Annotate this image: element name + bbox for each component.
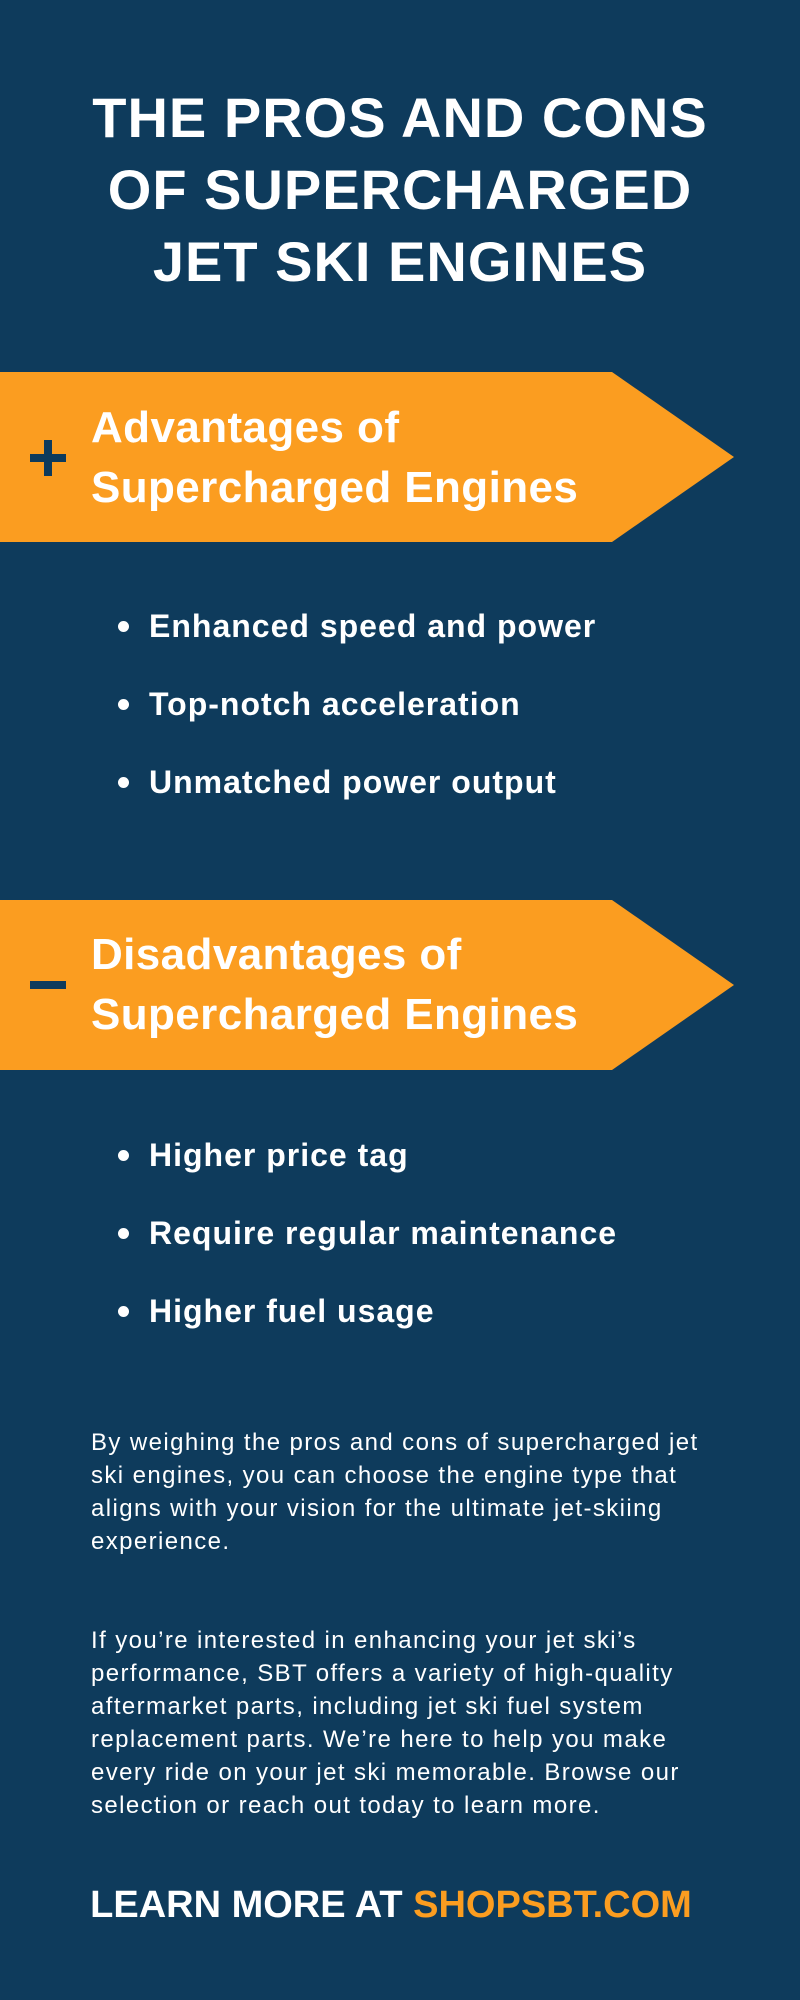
heading: advantages: Advantages of xyxy=(91,403,399,452)
paragraph: SBT offer: selection or reach out today to learn more. xyxy=(91,1792,601,1819)
icon: minus xyxy=(30,981,66,989)
list: advantages xyxy=(118,608,596,800)
list: disadvantages: Higher price tag xyxy=(149,1137,409,1173)
footer call to action: LEARN MORE AT SHOPSBT.COM xyxy=(90,1884,692,1926)
list: disadvantages: Higher fuel usage xyxy=(149,1293,434,1329)
paragraph: summary: aligns with your vision for the ultimate jet-skiing xyxy=(91,1495,663,1522)
banner: advantages xyxy=(0,372,734,542)
paragraph: summary: ski engines, you can choose the engine type that xyxy=(91,1462,677,1489)
paragraph: summary xyxy=(91,1429,699,1555)
title: OF SUPERCHARGED xyxy=(108,158,692,221)
heading: advantages xyxy=(91,403,578,512)
heading: disadvantages: Disadvantages of xyxy=(91,930,462,979)
paragraph: summary: experience. xyxy=(91,1528,230,1555)
title xyxy=(92,86,708,293)
title: JET SKI ENGINES xyxy=(153,230,647,293)
banner: disadvantages xyxy=(0,900,734,1070)
paragraph: SBT offer: performance, SBT offers a variety of high-quality xyxy=(91,1660,674,1687)
paragraph: SBT offer: every ride on your jet ski memorable. Browse our xyxy=(91,1759,680,1786)
list: advantages: Unmatched power output xyxy=(149,764,557,800)
paragraph: summary: By weighing the pros and cons of supercharged jet xyxy=(91,1429,699,1456)
title: THE PROS AND CONS xyxy=(92,86,708,149)
heading: disadvantages xyxy=(91,930,578,1039)
paragraph: SBT offer: replacement parts. We’re here to help you make xyxy=(91,1726,667,1753)
list: disadvantages: Require regular maintenance xyxy=(149,1215,617,1251)
list: advantages: Top-notch acceleration xyxy=(149,686,521,722)
heading: disadvantages: Supercharged Engines xyxy=(91,990,578,1039)
list: advantages: Enhanced speed and power xyxy=(149,608,596,644)
heading: advantages: Supercharged Engines xyxy=(91,463,578,512)
paragraph: SBT offer xyxy=(91,1627,680,1819)
paragraph: SBT offer: If you’re interested in enhancing your jet ski’s xyxy=(91,1627,637,1654)
paragraph: SBT offer: aftermarket parts, including jet ski fuel system xyxy=(91,1693,644,1720)
list: disadvantages xyxy=(118,1137,617,1329)
icon: plus xyxy=(30,440,66,476)
